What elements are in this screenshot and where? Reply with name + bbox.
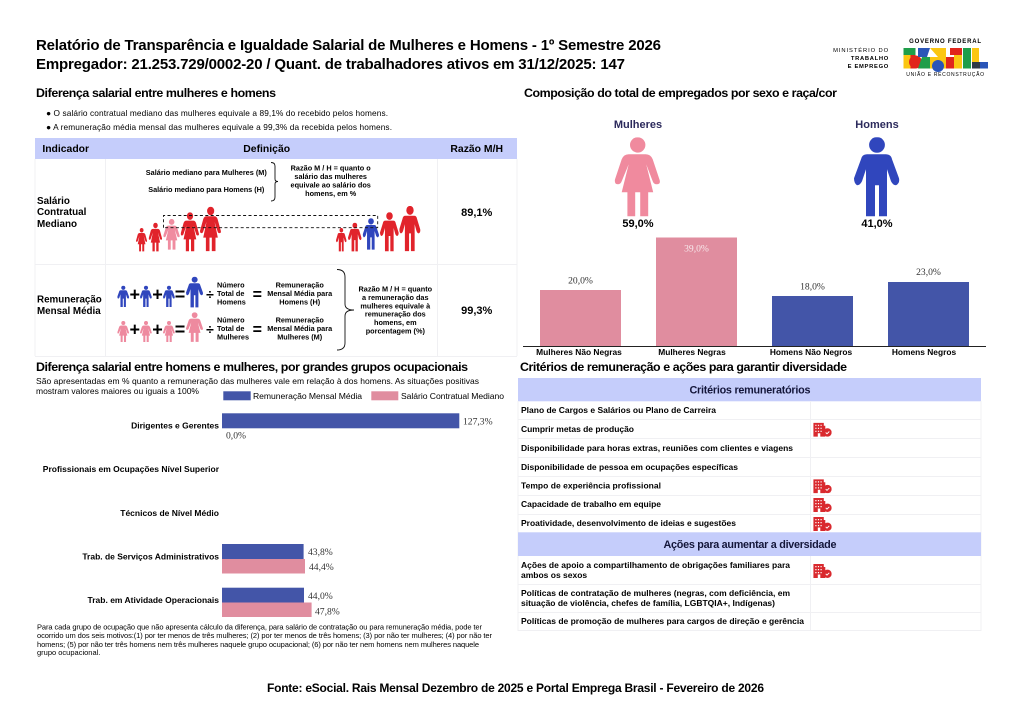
formula: women: Mulheres — [217, 332, 249, 342]
heading: composição: Composição do total de empregados por sexo e raça/cor — [524, 86, 837, 100]
formula: men: + — [129, 284, 140, 304]
heading: critérios: Critérios de remuneração e ações para garantir diversidade — [520, 360, 847, 374]
panel: criteria table — [518, 378, 981, 631]
pictogram: women ranked by salary — [136, 207, 221, 251]
formula: men: Homens (H) — [279, 298, 321, 306]
icon: proatividade — [813, 517, 832, 531]
definition text: razão remuneração: remuneração dos — [365, 310, 426, 319]
formula: men: Homens — [217, 298, 246, 306]
footnote — [37, 622, 492, 657]
bar chart: grupos ocupacionais: Trab. em Atividade Operacionais — [88, 595, 219, 605]
criteria rows: Cumprir metas de produção — [521, 424, 634, 434]
pictogram: mulheres — [614, 119, 662, 230]
icon: metas de produção — [813, 423, 832, 437]
definition text: razão remuneração: a remuneração das — [362, 293, 429, 302]
bar chart: sexo e raça/cor: Mulheres Não Negras — [536, 347, 622, 357]
report title: Relatório de Transparência e Igualdade Salarial de Mulheres e Homens - 1º Semestre 2026 — [36, 37, 661, 54]
definition text: salário mediano: Razão M / H = quanto o — [291, 164, 371, 172]
criteria rows: Tempo de experiência profissional — [521, 480, 661, 490]
pictogram: homens — [854, 119, 899, 230]
chart legend — [223, 391, 504, 401]
criteria rows: Plano de Cargos e Salários ou Plano de Carreira — [521, 405, 716, 415]
criteria rows: Disponibilidade para horas extras, reuniões com clientes e viagens — [521, 443, 793, 453]
logo: ministério and governo federal: TRABALHO — [851, 56, 889, 62]
table header: Razão M/H — [450, 144, 503, 155]
formula: women: = — [253, 322, 262, 338]
icon: experiência profissional — [813, 479, 832, 493]
value: 89,1%: 89,1% — [461, 207, 493, 219]
heading: grupos ocupacionais: Diferença salarial entre homens e mulheres, por grandes grupos ocupacionais — [36, 360, 468, 374]
formula: men: ÷ — [206, 286, 214, 302]
icon: obrigações familiares — [813, 564, 832, 578]
diversity rows: ambos os sexos — [521, 570, 587, 580]
bar chart: grupos ocupacionais: 44,4% — [309, 562, 334, 573]
definition text: salário mediano: Salário mediano para Homens (H) — [148, 185, 265, 194]
formula: women: + — [152, 320, 163, 340]
bar chart: sexo e raça/cor — [523, 238, 986, 357]
bar chart: grupos ocupacionais: Trab. de Serviços Administrativos — [82, 552, 219, 562]
definition text: salário mediano: salário das mulheres — [294, 172, 367, 181]
definition text: razão remuneração: porcentagem (%) — [366, 326, 425, 336]
explanatory text — [36, 376, 479, 396]
header: critérios remuneratórios — [518, 378, 981, 401]
formula: men: + — [152, 284, 163, 304]
header: critérios remuneratórios: Critérios remuneratórios — [690, 384, 810, 396]
logo: ministério and governo federal: GOVERNO FEDERAL — [909, 39, 982, 45]
table header — [35, 138, 517, 159]
pictogram: mulheres: 59,0% — [622, 218, 654, 230]
formula: women: + — [129, 320, 140, 340]
footnote: homens; (5) por não ter três homens nem três mulheres naquele grupo ocupacional; (6) por não ter nem homens nem mulheres naquele — [37, 640, 479, 649]
definition text: salário mediano: homens, em % — [305, 189, 357, 198]
definition text: razão remuneração: homens, em — [374, 318, 417, 327]
pictogram: mulheres: Mulheres — [614, 119, 662, 131]
chart legend: Salário Contratual Mediano — [401, 391, 504, 401]
bullet summary: ● A remuneração média mensal das mulheres equivale a 99,3% da recebida pelos homens. — [46, 122, 392, 132]
footnote: Para cada grupo de ocupação que não apresenta cálculo da diferença, para salário de contratação ou para remuneração média, pode ter — [37, 622, 482, 632]
criteria rows: Proatividade, desenvolvimento de ideias e sugestões — [521, 518, 736, 528]
bullet summary — [46, 108, 392, 132]
definition text: salário mediano — [146, 162, 371, 201]
bar chart: sexo e raça/cor: Mulheres Negras — [658, 347, 726, 357]
bullet summary: ● O salário contratual mediano das mulheres equivale a 89,1% do recebido pelos homens. — [46, 108, 388, 118]
report title — [36, 37, 661, 73]
formula: men: Remuneração — [276, 280, 324, 290]
diversity rows: Políticas de promoção de mulheres para cargos de direção e gerência — [521, 616, 804, 626]
indicator: remuneração mensal média — [37, 294, 102, 317]
formula: women: Mulheres (M) — [277, 332, 323, 342]
bar chart: grupos ocupacionais: 0,0% — [226, 430, 246, 442]
formula: men — [117, 277, 333, 307]
definition text: razão remuneração: mulheres equivale à — [360, 301, 431, 310]
definition text: razão remuneração: Razão M / H = quanto — [359, 284, 433, 294]
header: ações diversidade: Ações para aumentar a diversidade — [664, 539, 836, 551]
bar chart: sexo e raça/cor: 23,0% — [916, 267, 941, 278]
bar chart: grupos ocupacionais: 44,0% — [308, 591, 333, 602]
diversity rows: Ações de apoio a compartilhamento de obrigações familiares para — [521, 560, 790, 570]
indicator: salário contratual mediano: Mediano — [37, 219, 77, 230]
bar chart: grupos ocupacionais: Técnicos de Nível Médio — [120, 508, 219, 518]
bar chart: grupos ocupacionais: Profissionais em Ocupações Nível Superior — [43, 464, 220, 474]
criteria rows: Capacidade de trabalho em equipe — [521, 499, 661, 509]
diversity rows: Políticas de contratação de mulheres (negras, com deficiência, em — [521, 588, 790, 598]
formula: men: = — [175, 284, 185, 304]
icon: trabalho em equipe — [813, 498, 832, 512]
formula: women: ÷ — [206, 321, 214, 337]
formula: men: Mensal Média para — [267, 289, 333, 298]
indicator: salário contratual mediano — [37, 196, 87, 230]
pictogram: homens: 41,0% — [861, 218, 893, 230]
definition text: razão remuneração — [337, 270, 433, 350]
footnote: grupo ocupacional. — [37, 648, 100, 657]
formula: men: Total de — [217, 289, 244, 298]
table header: Definição — [243, 144, 290, 155]
heading: diferença salarial: Diferença salarial entre mulheres e homens — [36, 86, 276, 100]
bar chart: sexo e raça/cor: 18,0% — [800, 282, 825, 292]
explanatory text: São apresentadas em % quanto a remuneração das mulheres vale em relação à dos homens. As situações positivas — [36, 376, 479, 386]
table header: Indicador — [42, 144, 89, 155]
bar chart: grupos ocupacionais — [43, 413, 493, 618]
logo: ministério and governo federal: UNIÃO E RECONSTRUÇÃO — [906, 71, 985, 78]
diversity rows — [521, 560, 804, 626]
logo: ministério and governo federal: MINISTÉRIO DO — [833, 47, 889, 54]
header: ações diversidade — [518, 532, 981, 556]
bar chart: sexo e raça/cor: Homens Negros — [892, 347, 956, 357]
logo: ministério and governo federal: E EMPREGO — [848, 64, 889, 70]
indicator: remuneração mensal média: Remuneração — [37, 294, 102, 306]
pictogram: men ranked by salary — [336, 206, 420, 251]
value: 99,3%: 99,3% — [461, 305, 493, 317]
bar chart: grupos ocupacionais: 127,3% — [463, 416, 493, 428]
logo: ministério and governo federal — [833, 39, 988, 78]
formula: women — [117, 312, 333, 342]
formula: women: Total de — [217, 324, 244, 333]
criteria rows: Disponibilidade de pessoa em ocupações específicas — [521, 462, 738, 472]
explanatory text: mostram valores maiores ou iguais a 100% — [36, 386, 199, 396]
definition text: salário mediano: Salário mediano para Mulheres (M) — [146, 168, 267, 177]
footnote: ocorrido um dos seis motivos:(1) por ter menos de três mulheres; (2) por ter menos de três homens; (3) por não ter mulheres; (4) por não ter — [37, 631, 492, 640]
formula: women: Número — [217, 316, 245, 324]
indicator: remuneração mensal média: Mensal Média — [37, 306, 101, 317]
formula: men: = — [253, 286, 262, 304]
bar chart: grupos ocupacionais: 43,8% — [308, 547, 333, 558]
definition text: salário mediano: equivale ao salário dos — [291, 180, 371, 190]
formula: men: Número — [217, 280, 245, 290]
criteria rows — [521, 405, 793, 528]
formula: women: = — [175, 320, 185, 340]
bar chart: sexo e raça/cor: 20,0% — [568, 276, 593, 286]
diversity rows: situação de violência, chefes de família, LGBTQIA+, Indígenas) — [521, 598, 775, 608]
formula: women: Remuneração — [276, 316, 324, 324]
indicator: salário contratual mediano: Salário — [37, 196, 70, 207]
bar chart: sexo e raça/cor: 39,0% — [684, 244, 709, 254]
panel: indicator table — [35, 138, 517, 356]
bar chart: sexo e raça/cor: Homens Não Negros — [770, 347, 853, 357]
indicator: salário contratual mediano: Contratual — [37, 207, 87, 218]
pictogram: homens: Homens — [855, 119, 899, 131]
report title: Empregador: 21.253.729/0002-20 / Quant. de trabalhadores ativos em 31/12/2025: 147 — [36, 56, 625, 73]
bar chart: grupos ocupacionais: Dirigentes e Gerentes — [131, 420, 219, 430]
chart legend: Remuneração Mensal Média — [253, 391, 362, 401]
bar chart: grupos ocupacionais: 47,8% — [315, 606, 340, 618]
source footer: Fonte: eSocial. Rais Mensal Dezembro de 2025 e Portal Emprega Brasil - Fevereiro de 2026 — [267, 681, 764, 695]
formula: women: Mensal Média para — [267, 324, 333, 333]
